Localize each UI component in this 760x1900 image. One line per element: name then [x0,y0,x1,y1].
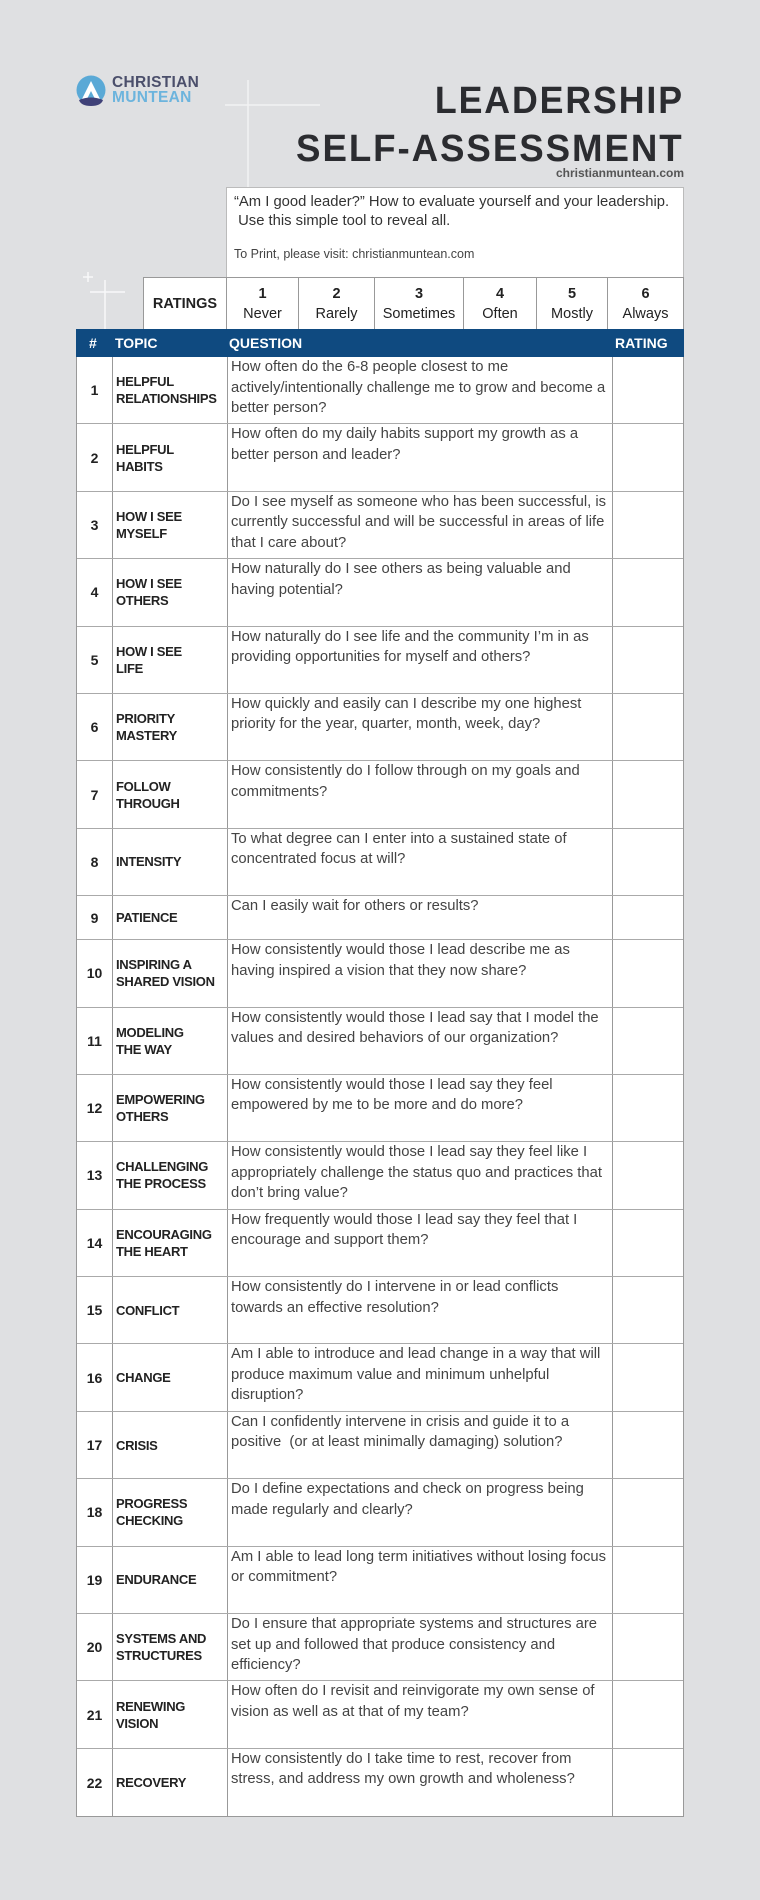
ratings scale: Never [243,306,282,322]
ratings scale: 3 [415,286,423,302]
assessment table: How consistently do I follow through on my goals and commitments? [231,763,580,800]
logo text: CHRISTIAN [112,74,199,91]
logo text: MUNTEAN [112,89,192,106]
assessment table: 12 [87,1100,102,1116]
ratings scale: Rarely [316,306,357,322]
assessment table: SYSTEMS AND STRUCTURES [116,1631,206,1663]
assessment table: How frequently would those I lead say they feel that I encourage and support them? [231,1212,577,1248]
assessment table: 7 [91,787,98,803]
assessment table: How consistently would those I lead say they feel empowered by me to be more and do more? [231,1077,553,1113]
intro box: Use this simple tool to reveal all. [238,213,450,229]
assessment table: 17 [87,1437,102,1453]
assessment table: PROGRESS [116,1496,187,1511]
assessment table: 13 [87,1167,102,1183]
assessment table: ENDURANCE [116,1572,196,1587]
ratings scale: Sometimes [383,306,455,322]
assessment table: MODELING [116,1025,184,1040]
table header bar: RATING [615,335,668,351]
assessment table: How often do the 6-8 people closest to me actively/intentionally challenge me to grow and become a better person? [231,359,605,416]
assessment table: How naturally do I see others as being valuable and having potential? [231,561,571,598]
assessment table: How often do my daily habits support my growth as a better person and leader? [231,426,578,463]
assessment table: MYSELF [116,526,167,541]
assessment table: 15 [87,1302,102,1318]
table header bar: QUESTION [229,335,302,351]
assessment table: MASTERY [116,728,177,743]
assessment table: PATIENCE [116,910,177,925]
sparkle decoration [225,80,320,187]
assessment table: How consistently do I take time to rest, recover from stress, and address my own growth and wholeness? [231,1751,575,1787]
assessment table: Can I easily wait for others or results? [231,898,479,914]
intro box [226,187,684,278]
assessment table: RENEWING [116,1699,185,1714]
ratings scale: 6 [641,286,650,302]
assessment table: Do I define expectations and check on progress being made regularly and clearly? [231,1481,584,1518]
assessment table: 5 [91,652,98,668]
assessment table: 22 [87,1774,102,1790]
assessment table: HABITS [116,459,163,474]
ratings scale: 5 [568,286,576,302]
assessment table: CHANGE [116,1370,171,1385]
title [296,80,684,180]
assessment table: HOW I SEE [116,509,182,524]
assessment table: 8 [91,854,98,870]
assessment table: 21 [87,1707,102,1723]
ratings scale: RATINGS [153,296,217,312]
icon: logo mountain [76,76,106,106]
assessment table: How consistently would those I lead say they feel like I appropriately challenge the status quo and practices that don’t bring value? [231,1144,602,1201]
assessment table: HOW I SEE [116,576,182,591]
assessment table: 6 [91,719,98,735]
assessment table: HOW I SEE [116,644,182,659]
assessment table: 20 [87,1639,102,1655]
assessment table: 19 [87,1572,102,1588]
website: christianmuntean.com [556,166,684,180]
assessment table: Can I confidently intervene in crisis and guide it to a positive (or at least minimally damaging) solution? [231,1414,569,1450]
assessment table: How often do I revisit and reinvigorate my own sense of vision as well as at that of my team? [231,1683,595,1720]
assessment table: THE PROCESS [116,1176,206,1191]
assessment table: CHECKING [116,1513,183,1528]
assessment table: EMPOWERING [116,1092,205,1107]
assessment table: 9 [91,910,98,926]
assessment table: How consistently would those I lead describe me as having inspired a vision that they now share? [231,942,570,979]
assessment table: HELPFUL [116,442,174,457]
ratings scale: Often [482,306,518,322]
assessment table: THE HEART [116,1244,188,1259]
assessment table: 10 [87,965,102,981]
assessment table: RECOVERY [116,1775,186,1790]
logo text [112,74,199,106]
ratings scale [143,277,684,329]
assessment table: 1 [91,382,98,398]
table header bar: # [89,335,97,351]
assessment table: THE WAY [116,1042,172,1057]
assessment table: INTENSITY [116,854,181,869]
assessment table: Am I able to lead long term initiatives without losing focus or commitment? [231,1549,606,1585]
title: LEADERSHIP [435,80,684,122]
assessment table: 11 [87,1033,102,1049]
assessment table: HELPFUL RELATIONSHIPS [116,374,217,406]
title: SELF-ASSESSMENT [296,128,684,170]
intro box: “Am I good leader?” How to evaluate yourself and your leadership. [234,194,669,210]
assessment table: OTHERS [116,593,168,608]
assessment table: FOLLOW [116,779,171,794]
intro box: To Print, please visit: christianmuntean.com [234,247,474,261]
assessment table: 3 [91,517,98,533]
assessment table: INSPIRING A SHARED VISION [116,957,215,989]
assessment table: 14 [87,1235,102,1251]
assessment table: CHALLENGING [116,1159,208,1174]
table header bar [76,329,684,357]
assessment table: CRISIS [116,1438,158,1453]
assessment table: How consistently would those I lead say that I model the values and desired behaviors of our organization? [231,1010,599,1046]
assessment table: How quickly and easily can I describe my one highest priority for the year, quarter, month, week, day? [231,696,581,732]
ratings scale: 1 [258,286,267,302]
assessment table: VISION [116,1716,158,1731]
assessment table: THROUGH [116,796,180,811]
ratings scale: Always [623,306,668,322]
assessment table: 16 [87,1370,102,1386]
assessment table: PRIORITY [116,711,175,726]
assessment table: To what degree can I enter into a sustained state of concentrated focus at will? [231,831,567,867]
assessment table: CONFLICT [116,1303,179,1318]
ratings scale: 4 [496,286,504,302]
assessment table: LIFE [116,661,143,676]
assessment table: How naturally do I see life and the community I’m in as providing opportunities for myself and others? [231,629,589,665]
assessment table: Am I able to introduce and lead change in a way that will produce maximum value and minimum unhelpful disruption? [231,1346,600,1403]
table header bar: TOPIC [115,335,158,351]
ratings scale: 2 [332,286,341,302]
ratings scale: Mostly [551,306,593,322]
logo [76,74,199,106]
assessment table: Do I see myself as someone who has been successful, is currently successful and will be successful in areas of life that I care about? [231,494,606,551]
assessment table: 4 [91,584,98,600]
assessment table: 2 [91,450,98,466]
assessment table: ENCOURAGING [116,1227,212,1242]
assessment table: 18 [87,1504,102,1520]
assessment table: How consistently do I intervene in or lead conflicts towards an effective resolution? [231,1279,558,1316]
assessment table [76,357,684,1817]
assessment table: Do I ensure that appropriate systems and structures are set up and followed that produce consistency and efficiency? [231,1616,597,1673]
assessment table: OTHERS [116,1109,168,1124]
